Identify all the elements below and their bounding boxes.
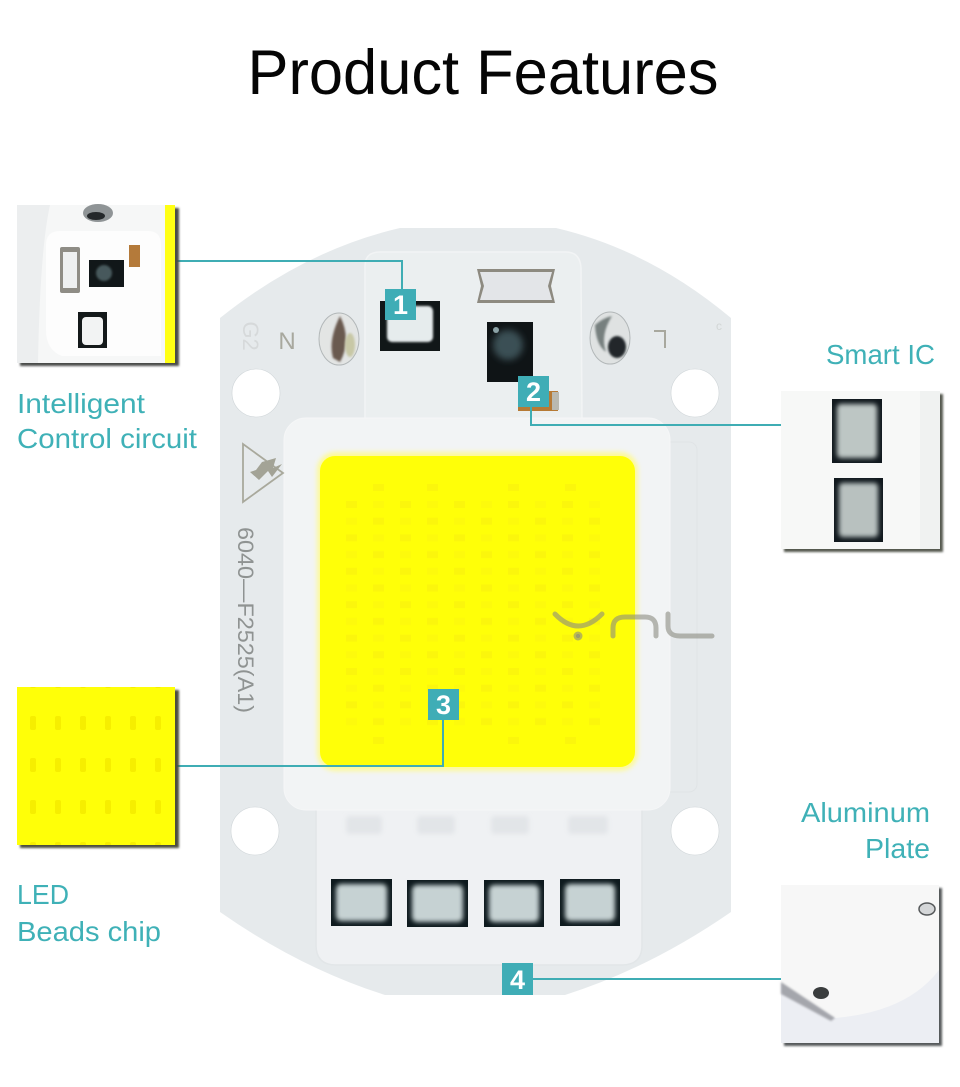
board markings: N <box>278 328 296 355</box>
connector 3 <box>176 720 443 766</box>
lower contact pads <box>331 879 620 927</box>
label: Aluminum Plate: Aluminum <box>801 797 930 828</box>
badge 1: 1 <box>393 290 408 320</box>
thumbnail: LED beads <box>17 687 179 848</box>
panel: LED driver board <box>220 228 731 995</box>
label: Smart IC: Smart IC <box>826 339 935 370</box>
YNL logo <box>555 614 712 638</box>
callout 4: Aluminum Plate <box>502 797 942 1046</box>
label: Intelligent Control circuit <box>17 388 197 454</box>
board markings <box>238 319 722 355</box>
warning triangle <box>243 444 283 502</box>
board markings: G2 <box>238 321 263 351</box>
label: Aluminum Plate <box>801 797 930 864</box>
board plate <box>220 228 731 995</box>
connector 4 <box>533 978 781 980</box>
raised lower section <box>316 790 642 965</box>
board markings: c <box>716 319 722 333</box>
raised top section <box>365 252 582 425</box>
badge 4 <box>502 963 533 995</box>
capacitor <box>518 391 559 411</box>
solder points <box>319 312 630 365</box>
raised centre panel <box>284 418 670 810</box>
label: LED Beads chip: LED <box>17 879 69 910</box>
label: Aluminum Plate: Plate <box>865 833 930 864</box>
title: Product Features <box>248 38 718 108</box>
model number: 6040—F2525(A1) <box>233 527 258 713</box>
connector 2 <box>531 407 781 425</box>
badge 2: 2 <box>526 377 541 407</box>
label: Intelligent Control circuit: Control circuit <box>17 423 197 454</box>
badge 3: 3 <box>436 690 451 720</box>
lower faint pads <box>346 816 608 834</box>
thumbnail: Smart IC <box>781 391 943 552</box>
thumbnail: aluminum plate <box>781 885 942 1046</box>
faint right ridge <box>660 442 697 792</box>
badge 3 <box>428 689 459 720</box>
connector 1 <box>176 261 402 289</box>
LED array <box>317 452 638 771</box>
mounting holes <box>231 369 719 855</box>
badge 1 <box>385 289 416 320</box>
thumbnail: control circuit <box>17 204 179 366</box>
callout 1: Intelligent Control circuit <box>17 204 416 454</box>
badge 2 <box>518 376 549 407</box>
badge 4: 4 <box>510 965 525 995</box>
label: Intelligent Control circuit: Intelligent <box>17 388 145 419</box>
callout 3: LED Beads chip <box>17 687 459 947</box>
fuse component <box>477 269 555 303</box>
label: LED Beads chip: Beads chip <box>17 916 161 947</box>
label: LED Beads chip <box>17 879 161 947</box>
callout 2: Smart IC <box>518 339 943 552</box>
rectifier component <box>380 301 440 351</box>
IC chip <box>487 322 533 382</box>
